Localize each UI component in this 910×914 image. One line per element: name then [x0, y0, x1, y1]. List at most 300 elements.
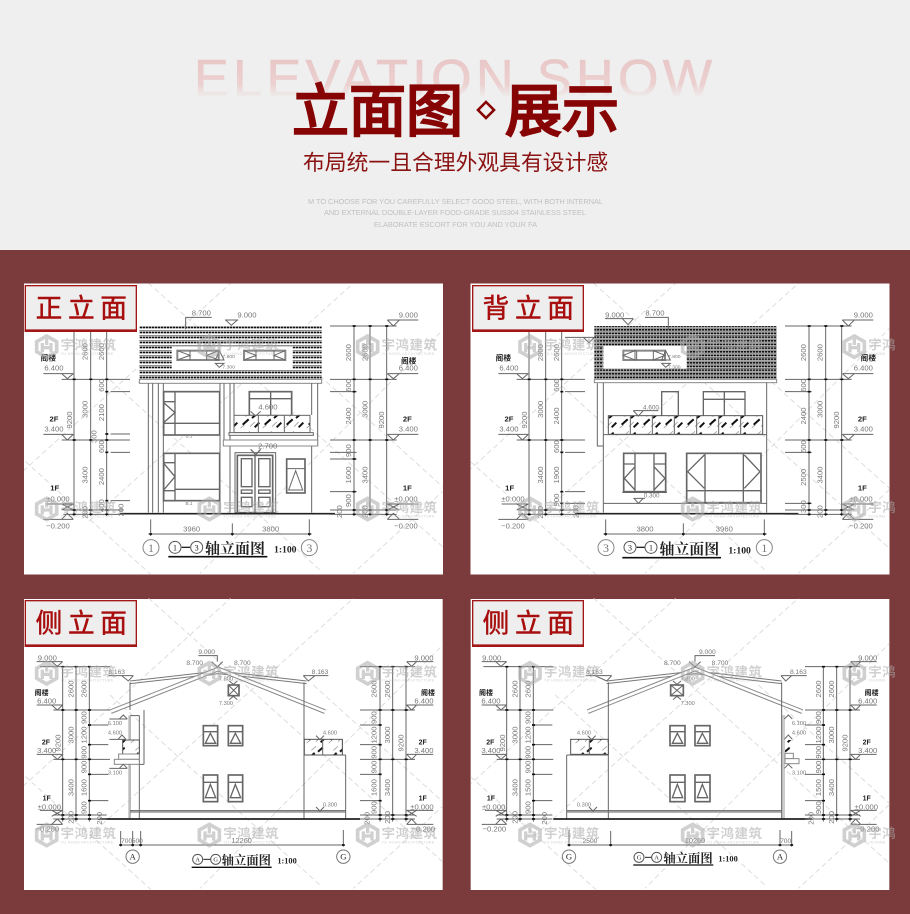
right levels: 3.400: [858, 746, 877, 755]
top level marks: 9.000: [237, 311, 257, 320]
small English description: ELABORATE ESCORT FOR YOU AND YOUR FA: [374, 220, 537, 229]
right levels: 3.400: [414, 746, 434, 755]
watermarks: 宇鸿: [868, 664, 896, 679]
watermarks: 宇鸿建筑: [61, 663, 117, 679]
right dimensions: 1600: [344, 466, 353, 484]
watermarks: YU HONG ARCHITECTURE: [61, 840, 114, 844]
right floor labels: 阁楼: [421, 688, 435, 697]
right levels: [387, 310, 418, 531]
label: 正立面: 正立面: [36, 294, 133, 324]
left dimensions: 200: [511, 811, 520, 824]
top level marks: 2.700: [258, 441, 277, 450]
watermarks: 宇鸿建筑: [382, 499, 438, 515]
left floor labels: [35, 688, 51, 802]
left dimensions: 900: [524, 801, 533, 814]
watermarks: 宇鸿建筑: [544, 663, 600, 679]
title: 立面图: [292, 66, 463, 148]
caption: 3: [628, 543, 632, 552]
left dimensions: 600: [552, 379, 561, 392]
balconies: [571, 715, 799, 768]
left dimensions: 900: [80, 761, 89, 773]
top level marks: 7.800: [681, 676, 695, 682]
axis dimension: 700: [780, 838, 792, 845]
right dimensions: 1600: [370, 779, 379, 796]
top level marks: 9.000: [605, 310, 624, 319]
maroon page background: [0, 250, 910, 914]
right levels: 9.000: [414, 653, 434, 662]
small English description: [308, 197, 603, 229]
watermarks: YU HONG ARCHITECTURE: [223, 679, 277, 683]
watermarks: YU HONG ARCHITECTURE: [707, 352, 760, 356]
left dimensions: 2800: [536, 344, 545, 361]
right dimensions: 9200: [377, 411, 386, 429]
right dimensions: 900: [370, 711, 379, 724]
left dimensions: 900: [524, 761, 533, 773]
watermarks: 宇鸿: [868, 826, 896, 841]
left dimensions: 9200: [520, 411, 529, 429]
right dimensions: 3000: [816, 401, 825, 418]
left levels: ±0.000: [501, 494, 525, 503]
left dimensions: 9200: [65, 411, 74, 429]
ground line: [575, 511, 798, 516]
watermarks: 宇鸿建筑: [544, 825, 600, 841]
left dimensions: 900: [524, 746, 533, 759]
caption: G: [566, 852, 572, 862]
left floor labels: 2F: [50, 414, 59, 423]
watermarks: 宇鸿建筑: [382, 337, 438, 353]
left levels: −0.200: [501, 522, 525, 531]
walls: [148, 383, 318, 513]
right dimensions: 200: [335, 505, 344, 518]
right levels: 3.400: [854, 425, 873, 434]
right levels: −0.200: [849, 522, 873, 531]
left dimensions: 2400: [552, 407, 561, 425]
right dimensions: 300: [799, 500, 808, 513]
caption: G: [637, 855, 642, 862]
top level marks: 4.600: [323, 730, 337, 736]
label: 背立面: [472, 286, 584, 331]
watermarks: YU HONG ARCHITECTURE: [61, 514, 114, 518]
caption: 3: [603, 541, 609, 555]
top level marks: 4.600: [108, 730, 122, 736]
left dimensions: 3000: [66, 726, 75, 744]
top level marks: 8.163: [312, 669, 329, 676]
top level marks: 0.300: [644, 492, 660, 499]
right dimensions: 2600: [344, 344, 353, 361]
right floor labels: [401, 355, 417, 493]
caption: A: [654, 855, 659, 862]
top level marks: 3.100: [108, 771, 122, 777]
right dimensions: 3400: [816, 466, 825, 484]
left levels: 9.000: [482, 653, 501, 662]
left levels: −0.200: [46, 522, 70, 531]
right levels: 9.000: [858, 653, 877, 662]
axis dimension: 3960: [716, 525, 733, 534]
vent: [671, 681, 683, 700]
right levels: ±0.000: [849, 494, 873, 503]
axis dimension: [148, 519, 312, 536]
left dimensions: 2600: [80, 680, 89, 698]
left dimensions: 2600: [524, 680, 533, 698]
axis dimension: 10260: [685, 836, 705, 845]
label: 正立面: [25, 286, 137, 331]
balcony: [603, 416, 767, 435]
left levels: −0.200: [36, 825, 59, 834]
axis dimension: 2500: [583, 838, 598, 845]
left dimensions: [62, 326, 130, 519]
right dimensions: 900: [370, 746, 379, 759]
watermarks: 宇鸿建筑: [223, 337, 279, 353]
watermarks: 宇鸿建筑: [61, 825, 117, 841]
left dimensions: 2600: [81, 343, 90, 360]
roof: [594, 326, 777, 383]
windows: [164, 392, 292, 501]
top level marks: 7.300: [222, 365, 235, 371]
top level marks: 7.800: [668, 354, 681, 360]
right floor labels: 2F: [419, 740, 427, 747]
watermarks: YU HONG ARCHITECTURE: [61, 679, 114, 683]
left levels: 3.400: [481, 746, 501, 755]
right floor labels: [419, 688, 435, 802]
watermarks: 宇鸿建筑: [382, 825, 438, 841]
ghost English heading: ELEVATION SHOW: [194, 50, 712, 108]
top level marks: 8.700: [645, 309, 665, 318]
right levels: ±0.000: [394, 494, 418, 503]
caption: A: [777, 852, 784, 862]
panel: rear elevation: [470, 284, 895, 574]
right dimensions: [785, 326, 852, 518]
watermarks: YU HONG ARCHITECTURE: [382, 352, 435, 356]
top level marks: 6.100: [108, 721, 122, 727]
right dimensions: 1200: [370, 726, 379, 744]
right dimensions: [805, 667, 860, 825]
right levels: −0.200: [412, 825, 435, 834]
right dimensions: 3400: [360, 466, 369, 484]
label: 背立面: 背立面: [483, 294, 580, 324]
left dimensions: 1900: [552, 466, 561, 484]
left dimensions: 200: [116, 504, 125, 516]
left floor labels: 1F: [505, 484, 514, 493]
left dimensions: 900: [524, 711, 533, 724]
right dimensions: 900: [814, 761, 823, 773]
right dimensions: [330, 326, 397, 518]
right dimensions: 200: [816, 505, 825, 518]
right floor labels: 1F: [419, 795, 427, 802]
caption: 1: [761, 541, 767, 555]
right dimensions: 3000: [383, 726, 392, 744]
left levels: 3.400: [499, 425, 519, 434]
left dimensions: 3000: [511, 726, 520, 744]
right floor labels: 1F: [858, 484, 867, 493]
right levels: 9.000: [854, 310, 873, 319]
small English description: M TO CHOOSE FOR YOU CAREFULLY SELECT GOOD STEEL, WITH BOTH INTERNAL: [308, 197, 603, 206]
right dimensions: 900: [814, 801, 823, 814]
top level marks: 4.600: [258, 402, 278, 411]
right floor labels: 2F: [403, 414, 412, 423]
top level marks: 7.300: [668, 365, 681, 371]
left dimensions: [40, 667, 110, 825]
windows: [203, 726, 243, 802]
right dimensions: 900: [344, 494, 353, 507]
top level marks: 4.600: [643, 404, 659, 411]
watermarks: YU HONG ARCHITECTURE: [707, 840, 760, 844]
right dimensions: 2500: [799, 469, 808, 486]
top level marks: B.1: [185, 501, 193, 506]
left levels: 6.400: [499, 364, 519, 373]
top level marks: 8.163: [586, 669, 603, 676]
right dimensions: 900: [370, 801, 379, 814]
left dimensions: 900: [80, 801, 89, 814]
right dimensions: 2400: [799, 407, 808, 425]
right levels: 9.000: [399, 310, 418, 319]
axis dimension: [568, 830, 793, 847]
left levels: ±0.000: [482, 802, 505, 811]
left dimensions: 200: [571, 505, 580, 518]
left levels: [481, 653, 507, 834]
watermarks: 宇鸿建筑: [223, 825, 279, 841]
axis dimension: 12260: [231, 836, 252, 845]
axis dimension: 700: [121, 838, 133, 845]
right floor labels: 阁楼: [861, 353, 876, 363]
caption: 1:100: [718, 855, 738, 864]
axis dimension: [603, 519, 767, 536]
right levels: [842, 310, 873, 531]
left dimensions: 200: [540, 812, 549, 825]
top level marks: [577, 649, 807, 811]
top level marks: 7.300: [681, 701, 695, 707]
left dimensions: 200: [81, 506, 90, 519]
axis dimension: [119, 830, 345, 847]
left floor labels: [41, 353, 59, 493]
watermarks: YU HONG: [868, 352, 886, 356]
right dimensions: 900: [814, 711, 823, 724]
top level marks: 0.300: [323, 802, 337, 808]
left dimensions: [517, 326, 585, 519]
left levels: [498, 337, 594, 531]
right dimensions: 2600: [383, 680, 392, 698]
axis dimension: 3800: [636, 525, 654, 534]
left floor labels: 2F: [486, 740, 495, 747]
right dimensions: 2600: [799, 344, 808, 361]
left levels: 6.400: [481, 696, 501, 705]
watermarks: YU HONG: [868, 679, 886, 683]
ground line: [120, 511, 335, 516]
watermarks: YU HONG ARCHITECTURE: [382, 514, 435, 518]
roof: [139, 326, 322, 383]
top level marks: [108, 649, 337, 811]
left dimensions: 1600: [80, 779, 89, 796]
top level marks: 6.100: [792, 721, 806, 727]
right levels: ±0.000: [855, 802, 878, 811]
left floor labels: 1F: [50, 484, 59, 493]
right levels: ±0.000: [410, 802, 434, 811]
caption: 轴立面图: [663, 850, 713, 865]
top level marks: 8.700: [234, 660, 251, 667]
panel: side elevation right: [470, 598, 895, 890]
watermarks: YU HONG ARCHITECTURE: [544, 840, 597, 844]
left dimensions: 400: [97, 499, 106, 512]
vent: [228, 681, 239, 700]
left levels: 3.400: [44, 425, 64, 434]
label: 侧立面: 侧立面: [483, 609, 580, 639]
caption: 1: [173, 543, 177, 552]
left levels: 3.400: [37, 746, 56, 755]
axis dimension: 500: [132, 838, 143, 845]
right floor labels: 阁楼: [401, 355, 417, 365]
roof: [588, 669, 802, 712]
right dimensions: 9200: [396, 734, 405, 752]
watermarks: 宇鸿建筑: [223, 663, 279, 679]
left dimensions: 2600: [511, 680, 520, 698]
caption: G: [213, 857, 218, 864]
caption: [562, 850, 787, 865]
right dimensions: 900: [814, 746, 823, 759]
right floor labels: [863, 688, 879, 802]
right floor labels: 2F: [858, 414, 867, 423]
right dimensions: 2400: [344, 407, 353, 425]
left floor labels: [496, 353, 514, 493]
title: 展示: [505, 66, 619, 148]
right levels: 6.400: [854, 364, 873, 373]
watermarks: YU HONG: [868, 840, 886, 844]
left dimensions: 2600: [552, 344, 561, 361]
top level marks: 7.300: [219, 701, 233, 707]
left dimensions: 2400: [97, 468, 106, 485]
right dimensions: 3000: [360, 401, 369, 418]
small English description: AND EXTERNAL DOUBLE-LAYER FOOD-GRADE SUS304 STAINLESS STEEL: [324, 208, 586, 217]
right levels: −0.200: [394, 522, 418, 531]
right floor labels: 1F: [403, 484, 412, 493]
left dimensions: 1200: [80, 726, 89, 744]
top level marks: B.1: [185, 434, 193, 439]
top level marks: 9.000: [198, 649, 215, 656]
left dimensions: 2600: [97, 343, 106, 360]
watermarks: YU HONG ARCHITECTURE: [382, 679, 435, 683]
top level marks: 8.163: [108, 669, 125, 676]
watermarks: YU HONG ARCHITECTURE: [223, 514, 277, 518]
left floor labels: 阁楼: [41, 353, 56, 363]
right dimensions: 2600: [827, 680, 836, 698]
right levels: 6.400: [414, 696, 434, 705]
ground line: [553, 816, 812, 821]
header background: [0, 0, 910, 250]
top level marks: 4.600: [577, 730, 591, 736]
right levels: [851, 653, 879, 834]
right dimensions: 9200: [832, 411, 841, 429]
left dimensions: 2600: [66, 680, 75, 698]
left dimensions: 9200: [54, 734, 63, 752]
watermarks: [37, 336, 438, 520]
top level marks: 8.700: [186, 660, 203, 667]
watermarks: 宇鸿建筑: [707, 499, 763, 515]
walls: [128, 682, 346, 819]
top level marks: 7.800: [219, 676, 233, 682]
left dimensions: 3000: [81, 401, 90, 418]
left levels: 9.000: [38, 653, 57, 662]
right floor labels: [858, 353, 876, 493]
right dimensions: 9200: [841, 734, 850, 752]
right dimensions: 1200: [814, 726, 823, 744]
right levels: 3.400: [399, 425, 418, 434]
left floor labels: 2F: [42, 740, 51, 747]
windows: [670, 726, 710, 802]
watermarks: 宇鸿建筑: [61, 499, 117, 515]
right floor labels: 阁楼: [865, 688, 879, 697]
right dimensions: 3400: [383, 779, 392, 796]
right dimensions: 2600: [814, 680, 823, 698]
top level marks: [605, 309, 681, 503]
watermarks: 宇鸿建筑: [707, 825, 763, 841]
left levels: 6.400: [37, 696, 56, 705]
upper door and window: [662, 392, 745, 416]
watermarks: [520, 336, 896, 520]
left dimensions: 900: [80, 711, 89, 724]
left levels: [43, 364, 73, 531]
left levels: [36, 653, 63, 834]
top level marks: 4.600: [792, 730, 806, 736]
panel: side elevation left: [24, 598, 443, 890]
left floor labels: 阁楼: [496, 353, 511, 363]
caption: 3: [195, 543, 199, 552]
right dimensions: 600: [799, 440, 808, 453]
right floor labels: 1F: [863, 795, 871, 802]
watermarks: YU HONG ARCHITECTURE: [707, 679, 760, 683]
left floor labels: 阁楼: [35, 688, 49, 697]
caption: 1:100: [277, 857, 297, 866]
top level marks: 9.000: [699, 649, 716, 656]
left levels: 6.400: [44, 364, 64, 373]
watermarks: YU HONG ARCHITECTURE: [382, 840, 435, 844]
right dimensions: 600: [799, 379, 808, 392]
watermarks: 宇鸿建筑: [544, 337, 600, 353]
balconies: [109, 715, 342, 768]
door and window: [235, 449, 305, 513]
top level marks: 8.163: [790, 669, 807, 676]
left levels: ±0.000: [38, 802, 61, 811]
caption: G: [340, 852, 346, 862]
left dimensions: 1200: [524, 726, 533, 744]
left floor labels: 1F: [43, 795, 51, 802]
top level marks: 8.700: [712, 660, 729, 667]
ground line: [100, 816, 360, 821]
label: 侧立面: [472, 601, 584, 646]
right dimensions: 3000: [827, 726, 836, 744]
label: 侧立面: [25, 601, 137, 646]
axis dimension: 3960: [183, 525, 200, 534]
caption: 轴立面图: [205, 539, 265, 557]
caption: 1: [649, 543, 653, 552]
caption: 轴立面图: [222, 852, 271, 867]
walls: [567, 682, 785, 819]
watermarks: 宇鸿: [868, 500, 896, 515]
watermarks: YU HONG ARCHITECTURE: [223, 840, 277, 844]
right dimensions: 900: [344, 444, 353, 457]
panel: front elevation: [24, 284, 443, 574]
right dimensions: 2600: [816, 344, 825, 361]
balcony: [223, 411, 318, 446]
left floor labels: 1F: [487, 795, 496, 802]
top level marks: 8.700: [192, 309, 211, 318]
subtitle: 布局统一且合理外观具有设计感: [303, 150, 608, 175]
watermarks: 宇鸿建筑: [707, 663, 763, 679]
caption: [126, 850, 350, 867]
right levels: 6.400: [399, 364, 418, 373]
watermarks: YU HONG ARCHITECTURE: [544, 352, 597, 356]
right levels: 6.400: [858, 696, 877, 705]
watermarks: 宇鸿建筑: [223, 499, 279, 515]
watermarks: [37, 663, 438, 846]
label: 侧立面: 侧立面: [36, 609, 133, 639]
